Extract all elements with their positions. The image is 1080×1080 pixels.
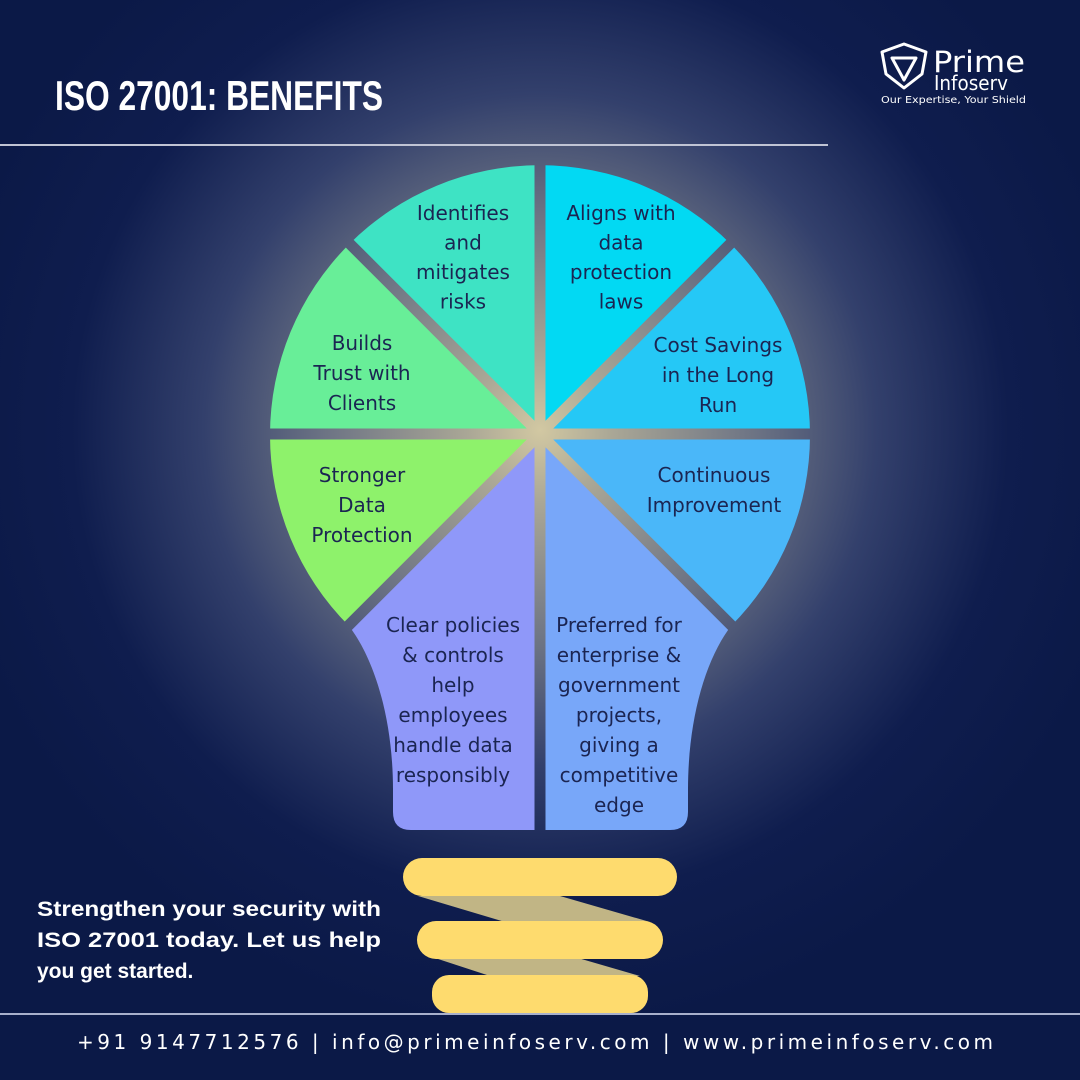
- label: identifies: and: [444, 230, 482, 254]
- bulb: [270, 165, 810, 830]
- label: clear policies: & controls: [402, 643, 504, 667]
- label: cost: Run: [699, 393, 737, 417]
- label: identifies: risks: [440, 290, 486, 314]
- segment: identifies: [354, 165, 534, 421]
- label: stronger: Protection: [311, 523, 413, 547]
- label: identifies: Identifies: [417, 201, 509, 225]
- segment: preferred: [546, 448, 728, 830]
- logo: [881, 44, 1026, 106]
- logo: Prime: [933, 45, 1025, 79]
- label: aligns: Aligns with: [566, 201, 676, 225]
- label: preferred: projects,: [576, 703, 662, 727]
- label: clear policies: handle data: [393, 733, 513, 757]
- call to action: [37, 898, 381, 983]
- call to action: ISO 27001 today. Let us help: [37, 929, 381, 952]
- label: builds: Clients: [328, 391, 396, 415]
- label: stronger: Data: [338, 493, 386, 517]
- label: aligns: protection: [570, 260, 672, 284]
- segment: stronger: [250, 434, 540, 724]
- label: continuous: Improvement: [647, 493, 781, 517]
- label: clear policies: Clear policies: [386, 613, 520, 637]
- label: aligns: laws: [599, 290, 643, 314]
- label: clear policies: employees: [398, 703, 508, 727]
- label: aligns: data: [598, 230, 644, 254]
- label: preferred: edge: [594, 793, 644, 817]
- bulb base: [403, 858, 677, 1013]
- title: ISO 27001: BENEFITS: [55, 72, 383, 119]
- bulb labels: [311, 201, 782, 817]
- call to action: you get started.: [37, 960, 193, 983]
- logo: Infoserv: [934, 71, 1008, 95]
- segment: cost savings: [553, 248, 810, 428]
- label: continuous: Continuous: [658, 463, 770, 487]
- label: builds: Builds: [332, 331, 392, 355]
- segment: builds: [270, 248, 527, 428]
- label: cost: Cost Savings: [654, 333, 782, 357]
- label: identifies: mitigates: [416, 260, 510, 284]
- label: clear policies: help: [431, 673, 475, 697]
- segment: aligns: [546, 165, 726, 421]
- segment: clear policies: [352, 447, 534, 830]
- segment: continuous: [553, 440, 810, 622]
- label: builds: Trust with: [312, 361, 411, 385]
- label: preferred: government: [558, 673, 680, 697]
- logo: Our Expertise, Your Shield: [881, 95, 1026, 106]
- label: clear policies: responsibly: [396, 763, 510, 787]
- label: preferred: enterprise &: [557, 643, 681, 667]
- label: preferred: competitive: [560, 763, 678, 787]
- footer contacts: +91 9147712576 | info@primeinfoserv.com | www.primeinfoserv.com: [77, 1030, 993, 1054]
- label: cost: in the Long: [662, 363, 774, 387]
- label: stronger: Stronger: [319, 463, 406, 487]
- label: preferred: Preferred for: [556, 613, 683, 637]
- label: preferred: giving a: [579, 733, 659, 757]
- call to action: Strengthen your security with: [37, 898, 381, 921]
- icon: shield: [882, 44, 926, 88]
